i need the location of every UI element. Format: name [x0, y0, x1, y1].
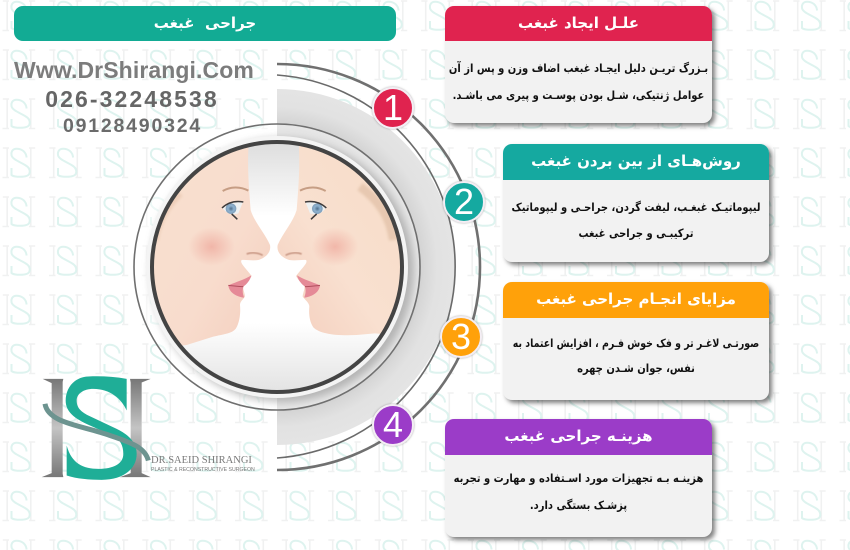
- badge: number 2: [443, 181, 485, 223]
- heading: benefits: مزایای انجـام جراحی غبغب: [536, 290, 736, 308]
- contact: website: Www.DrShirangi.Com: [14, 57, 254, 83]
- panel: cost: [445, 419, 712, 537]
- title bar: جراحی غبغب: [154, 14, 256, 32]
- text: causes: عوامل ژنتیکی، شـل بودن پوسـت و پیری می باشـد.: [453, 88, 704, 102]
- right eye and brow: [300, 187, 326, 191]
- badge: number 4: [372, 404, 414, 446]
- logo: Dr. Saeid Shirangi: [42, 376, 255, 480]
- badge: number 3: [440, 316, 482, 358]
- heading: causes: علـل ایجاد غبغب: [518, 14, 639, 32]
- text: benefits: نفس، جوان شـدن چهره: [577, 361, 695, 375]
- badge: number 4: 4: [383, 404, 403, 445]
- text: benefits: صورتـی لاغـر تر و فک خوش فـرم ، افزایش اعتماد به: [513, 336, 759, 350]
- text: cost: هزینـه بـه تجهیزات مورد اسـتفاده و مهارت و تجربه: [454, 471, 703, 485]
- heading: methods: [503, 144, 769, 180]
- contact: mobile: 09128490324: [63, 115, 202, 137]
- text: methods: لیپوماتیـک غبغـب، لیفت گردن، جراحـی و لیپوماتیک: [511, 200, 761, 214]
- contact: phone: 026-32248538: [45, 86, 219, 112]
- text: benefits: [513, 336, 759, 375]
- badge: number 1: [372, 87, 414, 129]
- text: cost: پزشـک بستگی دارد.: [530, 498, 627, 512]
- heading: cost: [445, 419, 712, 455]
- lips: [228, 275, 251, 298]
- logo subtitle: PLASTIC & RECONSTRUCTIVE SURGEON: [151, 467, 255, 473]
- text: cost: [454, 471, 703, 512]
- panel: causes: [445, 6, 712, 123]
- panel: benefits: [503, 282, 769, 400]
- title bar: [14, 6, 396, 41]
- heading: causes: [445, 6, 712, 41]
- badge: number 3: 3: [451, 316, 471, 357]
- text: methods: [511, 200, 761, 240]
- text: methods: ترکیبـی و جراحی غبغب: [578, 226, 693, 240]
- heading: methods: روش‌هـای از بین بردن غبغب: [531, 152, 741, 170]
- badge: number 1: 1: [383, 87, 403, 128]
- text: causes: [449, 61, 708, 102]
- panel: methods: [503, 144, 769, 262]
- logo name: DR.SAEID SHIRANGI: [151, 455, 252, 466]
- logo mark: [42, 376, 151, 480]
- heading: cost: هزینـه جراحی غبغب: [504, 427, 653, 445]
- badge: number 2: 2: [454, 181, 474, 222]
- nostrils: [247, 253, 263, 255]
- heading: benefits: [503, 282, 769, 318]
- text: causes: بـزرگ تریـن دلیل ایجـاد غبغب اضاف وزن و پس از آن: [449, 61, 708, 75]
- left eye and brow: [223, 187, 248, 191]
